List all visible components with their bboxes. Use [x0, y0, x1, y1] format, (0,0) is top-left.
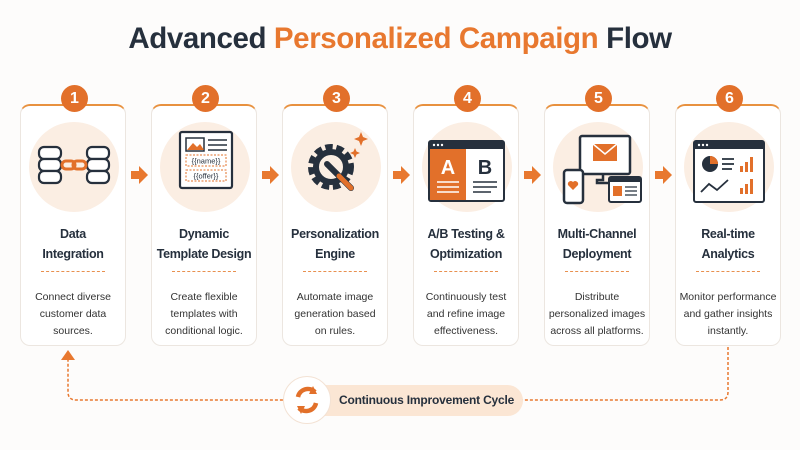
panel: step 4 ab	[413, 104, 519, 346]
description: customer data	[40, 308, 106, 320]
number badge 2	[192, 85, 219, 112]
icon: template: {{offer}}	[194, 172, 219, 180]
title: Advanced Personalized Campaign Flow	[128, 22, 672, 55]
panel: step 1 data integration	[20, 104, 126, 346]
description: Automate image	[297, 291, 373, 303]
panel: step 6 analytics	[675, 104, 781, 346]
number badge 5: 5	[594, 90, 603, 107]
description: generation based	[294, 308, 376, 320]
icon: cycle	[283, 376, 331, 424]
heading: Engine	[315, 247, 355, 261]
description: sources.	[53, 325, 93, 337]
description: across all platforms.	[550, 325, 644, 337]
heading: Deployment	[563, 247, 631, 261]
heading: Dynamic	[179, 227, 229, 241]
number badge 2: 2	[201, 90, 210, 107]
heading	[558, 227, 636, 261]
callout text: Continuous Improvement Cycle	[339, 393, 514, 407]
panel: step 5 multichannel	[544, 104, 650, 346]
number badge 4	[454, 85, 481, 112]
icon: gear with wand	[291, 122, 381, 212]
icon: A/B window: A	[441, 157, 455, 179]
heading: Multi-Channel	[558, 227, 636, 241]
description: and gather insights	[684, 308, 772, 320]
heading: A/B Testing &	[427, 227, 505, 241]
icon: template: {{name}}	[192, 156, 221, 166]
description: Continuously test	[426, 291, 506, 303]
number badge 3: 3	[332, 90, 341, 107]
icon: template	[160, 122, 250, 212]
description	[549, 291, 645, 337]
icon: databases linked	[29, 122, 119, 212]
number badge 3	[323, 85, 350, 112]
arrow 1-2	[131, 166, 148, 184]
description	[426, 291, 506, 337]
number badge 1: 1	[70, 90, 79, 107]
heading: Integration	[42, 247, 104, 261]
callout: continuous improvement cycle	[283, 376, 523, 424]
heading	[156, 227, 251, 261]
panel: step 3 engine	[282, 104, 388, 346]
heading	[291, 227, 379, 261]
description: on rules.	[315, 325, 355, 337]
description: Monitor performance	[680, 291, 776, 303]
description	[165, 291, 243, 337]
icon: devices	[553, 122, 643, 212]
icon: dashboard	[684, 122, 774, 212]
description	[680, 291, 776, 337]
arrow 5-6	[655, 166, 672, 184]
description	[294, 291, 376, 337]
description: effectiveness.	[434, 325, 498, 337]
description: personalized images	[549, 308, 645, 320]
heading	[42, 227, 104, 261]
arrow 4-5	[524, 166, 541, 184]
heading: Personalization	[291, 227, 379, 241]
description: conditional logic.	[165, 325, 243, 337]
icon: A/B window	[422, 122, 512, 212]
heading: Optimization	[430, 247, 502, 261]
heading	[427, 227, 505, 261]
heading: Analytics	[702, 247, 754, 261]
heading	[701, 227, 755, 261]
description: templates with	[170, 308, 238, 320]
description: and refine image	[427, 308, 505, 320]
number badge 6	[716, 85, 743, 112]
heading: Data	[60, 227, 86, 241]
arrow: feedback loop	[61, 347, 729, 401]
icon: A/B window: B	[478, 157, 492, 179]
heading: Real-time	[701, 227, 755, 241]
number badge 6: 6	[725, 90, 734, 107]
arrow 3-4	[393, 166, 410, 184]
description: Connect diverse	[35, 291, 111, 303]
description	[35, 291, 111, 337]
heading: Template Design	[157, 247, 251, 261]
arrow 2-3	[262, 166, 279, 184]
description: instantly.	[708, 325, 748, 337]
description: Distribute	[575, 291, 619, 303]
number badge 1	[61, 85, 88, 112]
panel: step 2 template	[151, 104, 257, 346]
description: Create flexible	[170, 291, 238, 303]
number badge 5	[585, 85, 612, 112]
number badge 4: 4	[463, 90, 472, 107]
